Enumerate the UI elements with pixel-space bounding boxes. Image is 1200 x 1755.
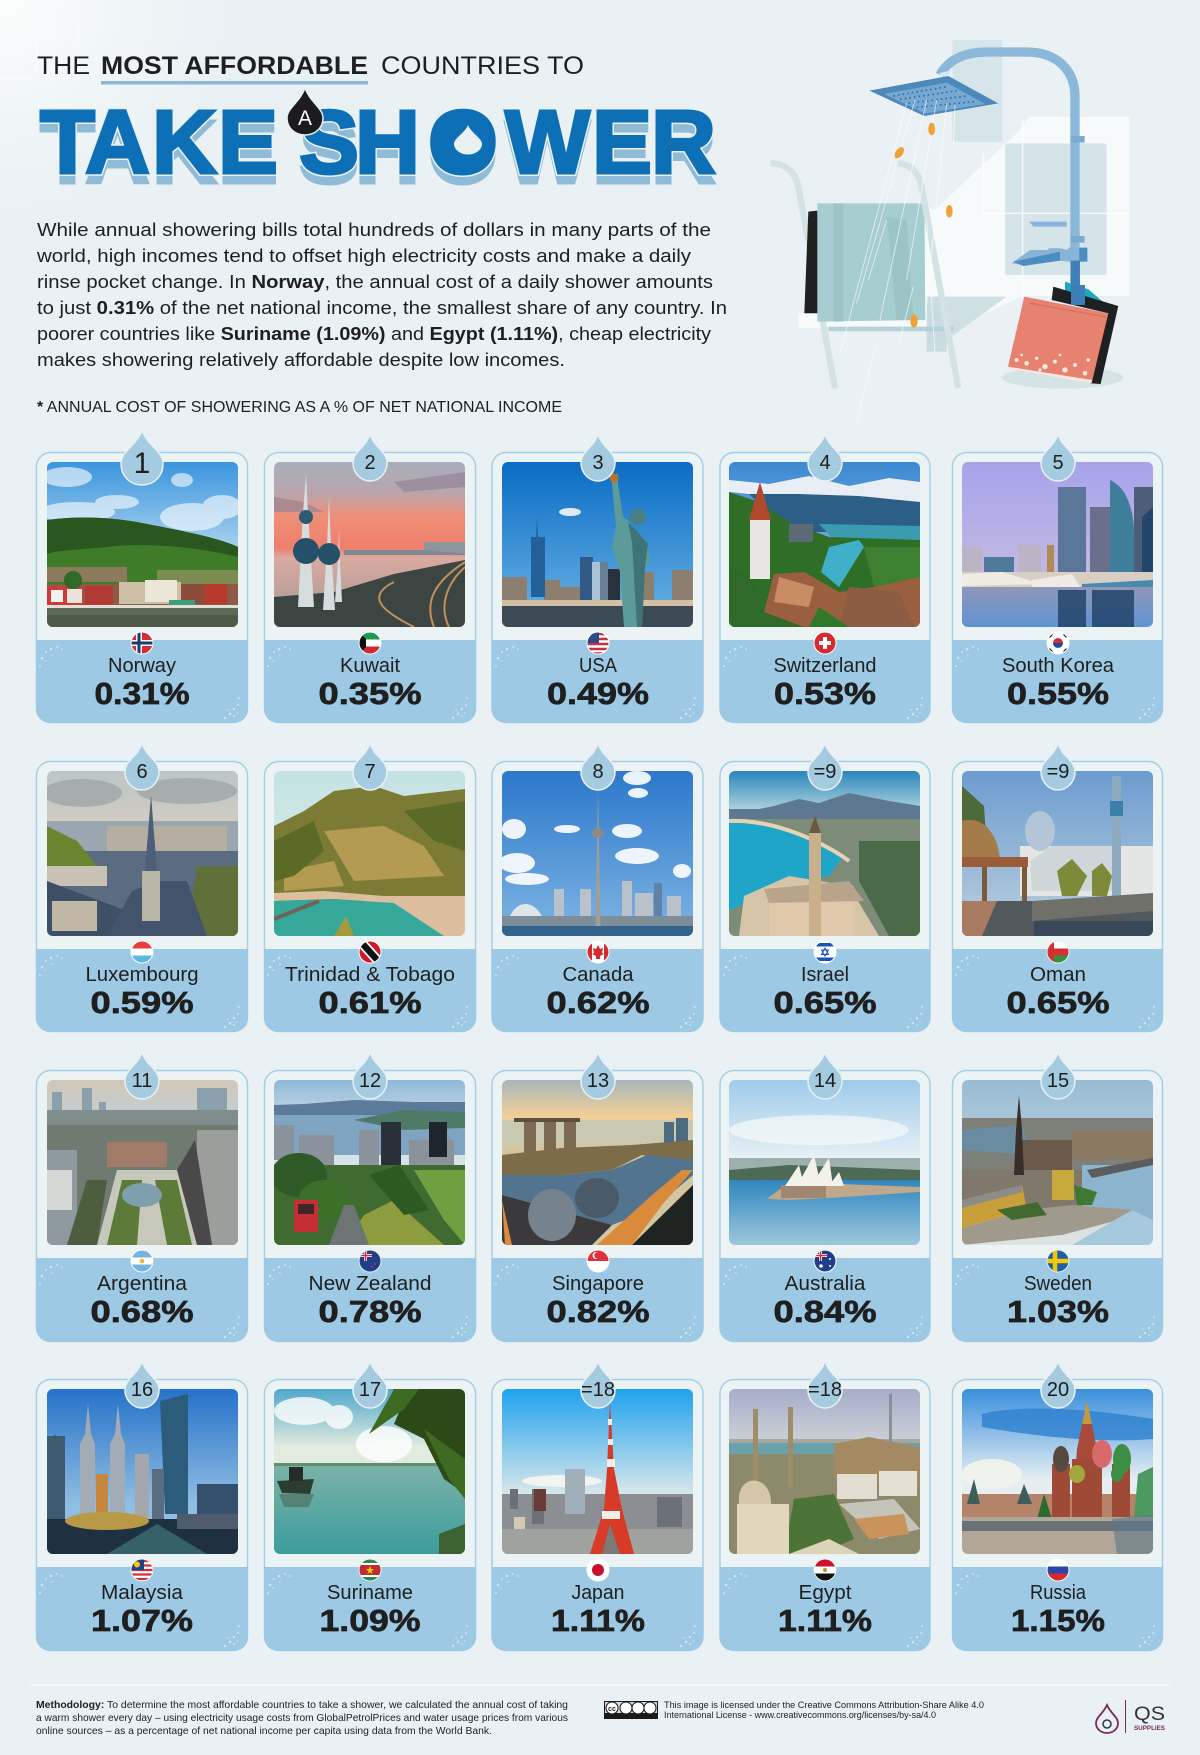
icon: black drop with letter A: A	[298, 107, 312, 130]
intro paragraph: While annual showering bills total hundreds of dollars in many parts of the	[37, 219, 711, 240]
card 13: Singapore	[492, 1052, 704, 1342]
card 5: South Korea	[952, 434, 1163, 723]
rank drop	[808, 434, 842, 481]
rank drop	[125, 743, 159, 790]
rank drop	[808, 1361, 842, 1408]
flag: Japan	[586, 1558, 610, 1582]
card 7: Trinidad & Tobago	[264, 743, 476, 1032]
towel rail	[771, 163, 953, 388]
flag: USA	[586, 632, 610, 654]
photo: Sydney Opera House	[729, 1080, 920, 1245]
card 16: Malaysia	[36, 1361, 248, 1651]
value: 0.65%	[774, 985, 876, 1020]
footnote: * ANNUAL COST OF SHOWERING AS A % OF NET NATIONAL INCOME	[37, 399, 562, 416]
card frame	[264, 762, 476, 1032]
photo: Toronto CN Tower	[499, 771, 693, 936]
flag: Norway	[130, 632, 154, 654]
value: 0.55%	[1007, 676, 1109, 711]
card 19: Egypt	[720, 1361, 930, 1651]
country name: Australia	[784, 1273, 866, 1295]
rank drop	[353, 743, 387, 790]
rank drop: =18	[581, 1379, 615, 1401]
wall tiles	[798, 40, 1129, 352]
card frame	[264, 452, 476, 723]
card frame	[264, 1070, 476, 1342]
photo: Busan marina	[962, 462, 1153, 627]
faucet	[1012, 136, 1087, 286]
card frame	[720, 1380, 930, 1651]
value: 0.78%	[318, 1294, 422, 1329]
card frame	[720, 762, 930, 1032]
headline: take a shower: TAKE	[40, 93, 278, 193]
photo: Buenos Aires plaza	[47, 1080, 238, 1245]
card frame	[952, 452, 1163, 723]
card frame	[952, 1380, 1163, 1651]
flag: Singapore	[586, 1250, 610, 1272]
flag: Switzerland	[814, 632, 836, 654]
creative commons badge: cc	[608, 1706, 616, 1713]
flag: Australia	[814, 1250, 836, 1272]
card frame	[720, 1070, 930, 1342]
headline: take a shower: TAKE	[40, 93, 278, 193]
rank drop: 11	[132, 1070, 152, 1092]
rank drop: 6	[136, 761, 148, 783]
photo: Muscat waterfront	[962, 771, 1153, 936]
rank drop: 1	[134, 447, 150, 480]
subtitle: THE	[37, 52, 90, 80]
water streaks	[840, 100, 955, 423]
towel rail front	[897, 163, 958, 388]
photo: Alexandria, Egypt	[729, 1389, 920, 1554]
flag: Trinidad and Tobago	[358, 940, 382, 964]
flag: Malaysia	[130, 1558, 154, 1582]
top-left tile glow	[0, 0, 240, 220]
value: 0.49%	[547, 676, 649, 711]
card frame	[492, 762, 704, 1032]
towel	[804, 203, 925, 322]
flag: Canada	[586, 940, 610, 964]
value: 1.09%	[320, 1603, 420, 1638]
rank drop: 13	[587, 1070, 609, 1092]
QS Supplies logo: QS	[1134, 1704, 1165, 1725]
intro paragraph: poorer countries like Suriname (1.09%) and Egypt (1.11%) , cheap electricity	[37, 323, 712, 344]
coins	[893, 123, 953, 328]
card frame	[952, 1070, 1163, 1342]
rank drop	[121, 430, 163, 485]
country name: Luxembourg	[86, 964, 198, 986]
card 8: Canada	[492, 743, 704, 1032]
rank drop	[125, 1361, 159, 1408]
country name: Switzerland	[774, 655, 876, 677]
card frame	[36, 452, 248, 723]
rank drop: 14	[814, 1070, 836, 1092]
photo: Suriname river	[274, 1389, 465, 1554]
value: 1.11%	[778, 1603, 872, 1638]
card 15: Sweden	[952, 1052, 1163, 1342]
photo: Luxembourg city	[42, 771, 238, 936]
photo: Marina Bay Singapore	[502, 1080, 693, 1245]
card 9: Israel	[720, 743, 930, 1032]
photo: Saint Basil's Cathedral	[962, 1389, 1153, 1554]
flag: Russia	[1046, 1558, 1070, 1582]
country name: Kuwait	[340, 655, 400, 677]
country name: Canada	[562, 964, 634, 986]
country name: Argentina	[97, 1273, 188, 1295]
icon: black drop with letter A	[287, 88, 323, 135]
country name: Japan	[572, 1582, 624, 1604]
flag: Oman	[1046, 940, 1070, 964]
card frame	[36, 762, 248, 1032]
card 14: Australia	[720, 1052, 930, 1342]
headline: take a shower: TAKE	[40, 103, 278, 203]
rank drop: 12	[359, 1070, 381, 1092]
value: 1.07%	[91, 1603, 193, 1638]
title	[37, 52, 716, 203]
value: 0.53%	[774, 676, 876, 711]
value: 0.31%	[94, 676, 190, 711]
rank drop	[1041, 434, 1075, 481]
rank drop	[808, 1052, 842, 1099]
card frame	[36, 1380, 248, 1651]
methodology: a warm shower every day – using electricity usage costs from GlobalPetrolPrices and water usage prices from various	[36, 1712, 568, 1724]
rank drop	[581, 434, 615, 481]
rank drop: 15	[1047, 1070, 1069, 1092]
card 10: Oman	[952, 743, 1163, 1032]
card frame	[720, 452, 930, 723]
flag: Luxembourg	[130, 940, 154, 964]
flag: Suriname	[358, 1558, 382, 1582]
intro paragraph: rinse pocket change. In Norway , the annual cost of a daily shower amounts	[37, 271, 713, 292]
photo: Kuwait Towers	[274, 462, 465, 627]
photo: Kuala Lumpur	[47, 1389, 238, 1554]
country name: Malaysia	[101, 1582, 184, 1604]
flag: Israel	[814, 940, 836, 964]
country name: Singapore	[552, 1273, 644, 1295]
rank drop: =18	[808, 1379, 842, 1401]
rank drop	[581, 1361, 615, 1408]
rank drop	[581, 743, 615, 790]
rank drop: 8	[592, 761, 604, 783]
wallet shadow	[1002, 367, 1123, 389]
value: 0.61%	[318, 985, 422, 1020]
rank drop: 7	[364, 761, 376, 783]
headline: take a shower: SHOWER	[299, 103, 716, 203]
subtitle	[37, 52, 584, 80]
subtitle: COUNTRIES TO	[381, 52, 584, 80]
card 6: Luxembourg	[36, 743, 248, 1032]
intro paragraph: to just 0.31% of the net national income, the smallest share of any country. In	[37, 297, 727, 318]
country name: Trinidad & Tobago	[285, 964, 455, 986]
flag: South Korea	[1046, 632, 1070, 654]
photo: Tel Aviv coast	[729, 771, 920, 936]
rank drop: 2	[364, 452, 376, 474]
country name: Israel	[801, 964, 849, 986]
headline: take a shower: SHOWER	[299, 93, 716, 193]
rank drop: 17	[359, 1379, 381, 1401]
subtitle underline	[101, 81, 368, 84]
value: 0.68%	[90, 1294, 194, 1329]
flag: Kuwait	[358, 632, 382, 654]
rank drop	[353, 1052, 387, 1099]
photo: Bergen harbour	[39, 462, 242, 627]
value: 0.65%	[1006, 985, 1110, 1020]
intro paragraph: world, high incomes tend to offset high electricity costs and make a daily	[36, 245, 692, 266]
country name: New Zealand	[308, 1273, 432, 1295]
QS Supplies logo	[1096, 1700, 1166, 1733]
value: 0.59%	[90, 985, 194, 1020]
country name: Suriname	[327, 1582, 413, 1604]
card frame	[264, 1380, 476, 1651]
card 18: Japan	[492, 1361, 704, 1651]
value: 1.15%	[1011, 1603, 1105, 1638]
photo: Stockholm	[962, 1080, 1153, 1245]
rank drop	[581, 1052, 615, 1099]
intro paragraph: makes showering relatively affordable despite low incomes.	[37, 349, 565, 370]
value: 1.11%	[551, 1603, 645, 1638]
QS Supplies logo: SUPPLIES	[1134, 1725, 1166, 1732]
card frame	[952, 762, 1163, 1032]
country name: USA	[579, 655, 618, 677]
card frame	[492, 452, 704, 723]
card 2: Kuwait	[264, 434, 476, 723]
card 20: Russia	[952, 1361, 1163, 1651]
card frame	[36, 1070, 248, 1342]
licence text	[664, 1700, 984, 1720]
card 1: Norway	[36, 430, 248, 723]
subtitle: MOST AFFORDABLE	[101, 52, 368, 80]
rank drop: 5	[1052, 452, 1064, 474]
country name: Egypt	[798, 1582, 852, 1604]
methodology: online sources – as a percentage of net national income per capita using data from the World Bank.	[36, 1725, 492, 1737]
card 17: Suriname	[264, 1361, 476, 1651]
card 11: Argentina	[36, 1052, 248, 1342]
card frame	[492, 1380, 704, 1651]
licence text: International License - www.creativecommons.org/licenses/by-sa/4.0	[664, 1710, 936, 1720]
card 12: New Zealand	[264, 1052, 476, 1342]
value: 0.62%	[546, 985, 650, 1020]
methodology	[36, 1699, 568, 1737]
value: 0.82%	[546, 1294, 650, 1329]
illustration: shower, towel rack and wallet	[771, 40, 1129, 423]
methodology: Methodology: To determine the most affordable countries to take a shower, we calculated the annual cost of taking	[36, 1699, 568, 1711]
headline: take a shower	[40, 93, 716, 203]
photo: Thun, Switzerland	[729, 462, 920, 627]
flag: Argentina	[130, 1250, 154, 1272]
licence text: This image is licensed under the Creative Commons Attribution-Share Alike 4.0	[664, 1700, 984, 1710]
country name: Sweden	[1024, 1273, 1092, 1295]
flag: Egypt	[814, 1558, 836, 1582]
rank drop	[1041, 1361, 1075, 1408]
intro paragraph	[36, 219, 727, 370]
shower head	[869, 73, 998, 116]
rank drop	[353, 1361, 387, 1408]
rank drop	[1041, 1052, 1075, 1099]
photo: Tokyo Tower	[502, 1389, 693, 1554]
flag: Sweden	[1046, 1250, 1070, 1272]
shower pipe	[940, 52, 1075, 283]
country name: Oman	[1030, 964, 1086, 986]
rank drop: 20	[1047, 1379, 1069, 1401]
creative commons badge	[604, 1701, 658, 1719]
rank drop: 3	[592, 452, 604, 474]
value: 1.03%	[1007, 1294, 1109, 1329]
photo: Wellington cable car	[271, 1080, 465, 1245]
card frame	[492, 1070, 704, 1342]
rank drop: =9	[1047, 761, 1069, 783]
country name: Russia	[1030, 1582, 1087, 1604]
rank drop	[808, 743, 842, 790]
photo: Tobago bay	[274, 771, 465, 936]
rank drop: 4	[819, 452, 831, 474]
rank drop	[353, 434, 387, 481]
wallet	[1008, 282, 1118, 384]
card 3: USA	[492, 434, 704, 723]
rank drop	[1041, 743, 1075, 790]
photo: Statue of Liberty	[502, 462, 693, 627]
value: 0.84%	[774, 1294, 876, 1329]
country name: South Korea	[1002, 655, 1115, 677]
rank drop: =9	[814, 761, 836, 783]
rank drop: 16	[131, 1379, 153, 1401]
flag: New Zealand	[358, 1250, 382, 1272]
card 4: Switzerland	[720, 434, 930, 723]
headline: take a shower: SHOWER	[299, 93, 716, 193]
rank drop	[125, 1052, 159, 1099]
country name: Norway	[108, 655, 176, 677]
value: 0.35%	[318, 676, 422, 711]
